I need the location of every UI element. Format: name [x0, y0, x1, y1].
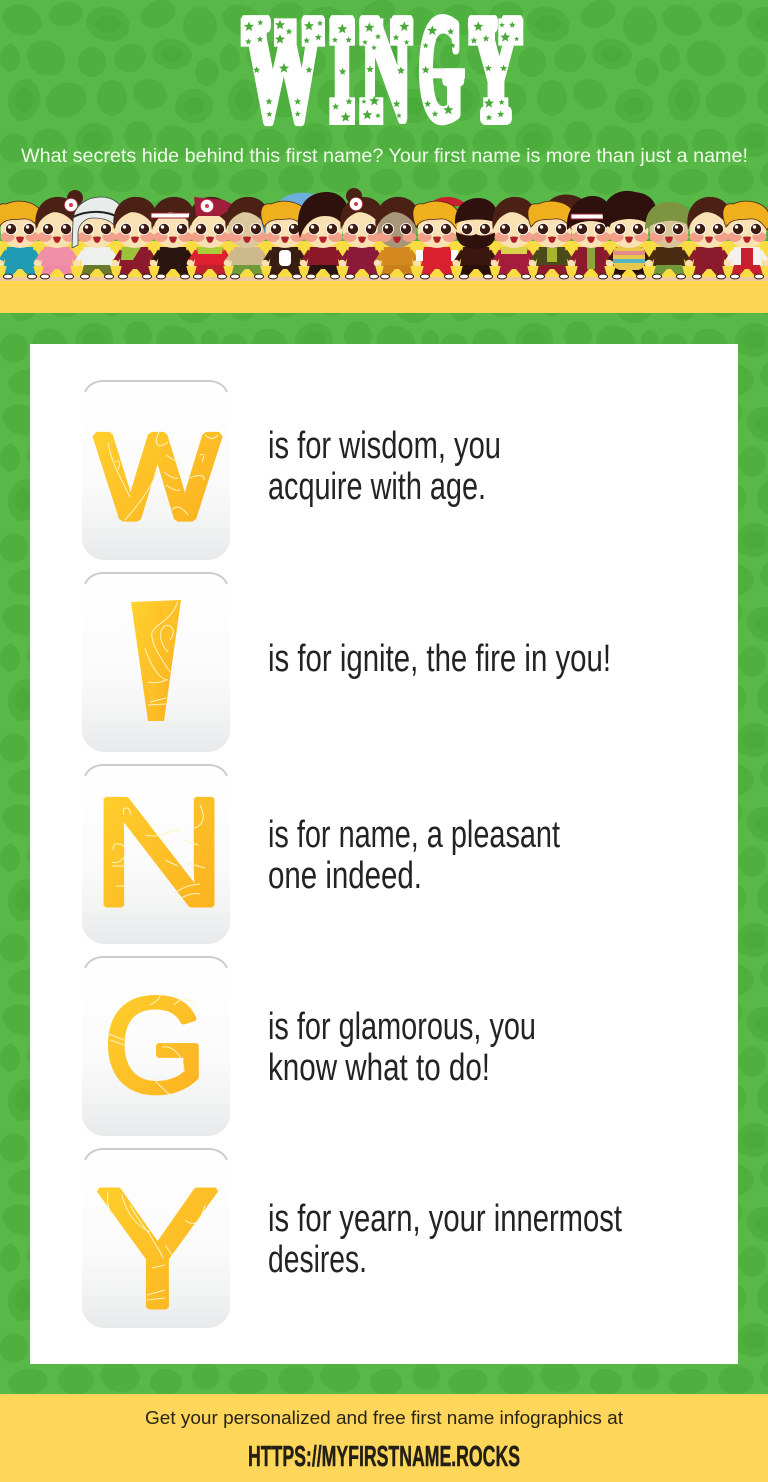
letter Y: Y: [95, 1153, 220, 1343]
subtitle: What secrets hide behind this first name? Your first name is more than just a name!: [21, 146, 748, 167]
character: lime and maroon outfit: [112, 197, 158, 279]
character: green headwear: [645, 202, 692, 279]
character: dark skin orange outfit: [374, 197, 420, 279]
character: blue cap apron: [261, 193, 319, 279]
row: letter W: [82, 380, 501, 560]
text: Y line: [268, 1198, 622, 1281]
footer text: Get your personalized and free first name infographics at: [145, 1407, 623, 1428]
character: flower girl maroon: [339, 188, 385, 279]
text: G line: is for glamorous, you: [268, 1006, 536, 1048]
card: G: [82, 956, 230, 1136]
letter W: W: [96, 409, 220, 544]
row: letter G: [82, 956, 536, 1136]
character: maroon robe plaster: [686, 197, 732, 279]
footer: [0, 1394, 768, 1482]
footer url: HTTPS://MYFIRSTNAME.ROCKS: [248, 1441, 520, 1473]
row: letter Y: [82, 1148, 622, 1343]
character: maroon robe headband: [567, 196, 614, 279]
title slab blocks and stars: [241, 18, 523, 125]
row: letter I: [82, 567, 611, 757]
character: red dress red cap: [413, 197, 467, 279]
row: letter N: [82, 764, 560, 944]
character: patterned headband: [150, 197, 196, 279]
card: W: [82, 380, 230, 560]
character: bearded dark outfit: [453, 198, 499, 279]
character: maroon hat red skirt: [187, 197, 236, 279]
character: overalls boy: [0, 201, 43, 279]
text: W line: acquire with age.: [268, 466, 486, 508]
title lettering: [243, 0, 521, 151]
text: W line: is for wisdom, you: [268, 425, 501, 467]
character: big black hair: [298, 192, 350, 279]
text: I line: is for ignite, the fire in you!: [268, 638, 611, 680]
text: N line: is for name, a pleasant: [268, 814, 560, 856]
letter N: N: [90, 765, 228, 939]
card: N: [82, 764, 230, 944]
character: grass skirt: [224, 197, 270, 279]
character: olive vest: [528, 194, 586, 279]
character: white headdress: [72, 197, 124, 279]
text: N line: one indeed.: [268, 855, 422, 897]
letter I: [131, 567, 181, 757]
banner: row of cartoon characters: [0, 188, 768, 313]
character: blond red white dress: [723, 201, 768, 279]
card: Y: [82, 1148, 230, 1328]
text: W line: [268, 425, 501, 508]
text: Y line: desires.: [268, 1239, 367, 1281]
character: pink kimono girl: [34, 190, 83, 279]
text: Y line: is for yearn, your innermost: [268, 1198, 622, 1240]
character: rainbow stripes: [603, 191, 656, 279]
card: I: [82, 572, 230, 752]
character: polka skirt: [491, 197, 537, 279]
title: [241, 0, 523, 151]
letter I: I: [143, 567, 169, 757]
text: G line: [268, 1006, 536, 1089]
letter G: G: [103, 969, 207, 1121]
panel: white letters panel: [30, 344, 738, 1364]
text: N line: [268, 814, 560, 897]
text: G line: know what to do!: [268, 1047, 490, 1089]
yellow band: [0, 241, 768, 313]
